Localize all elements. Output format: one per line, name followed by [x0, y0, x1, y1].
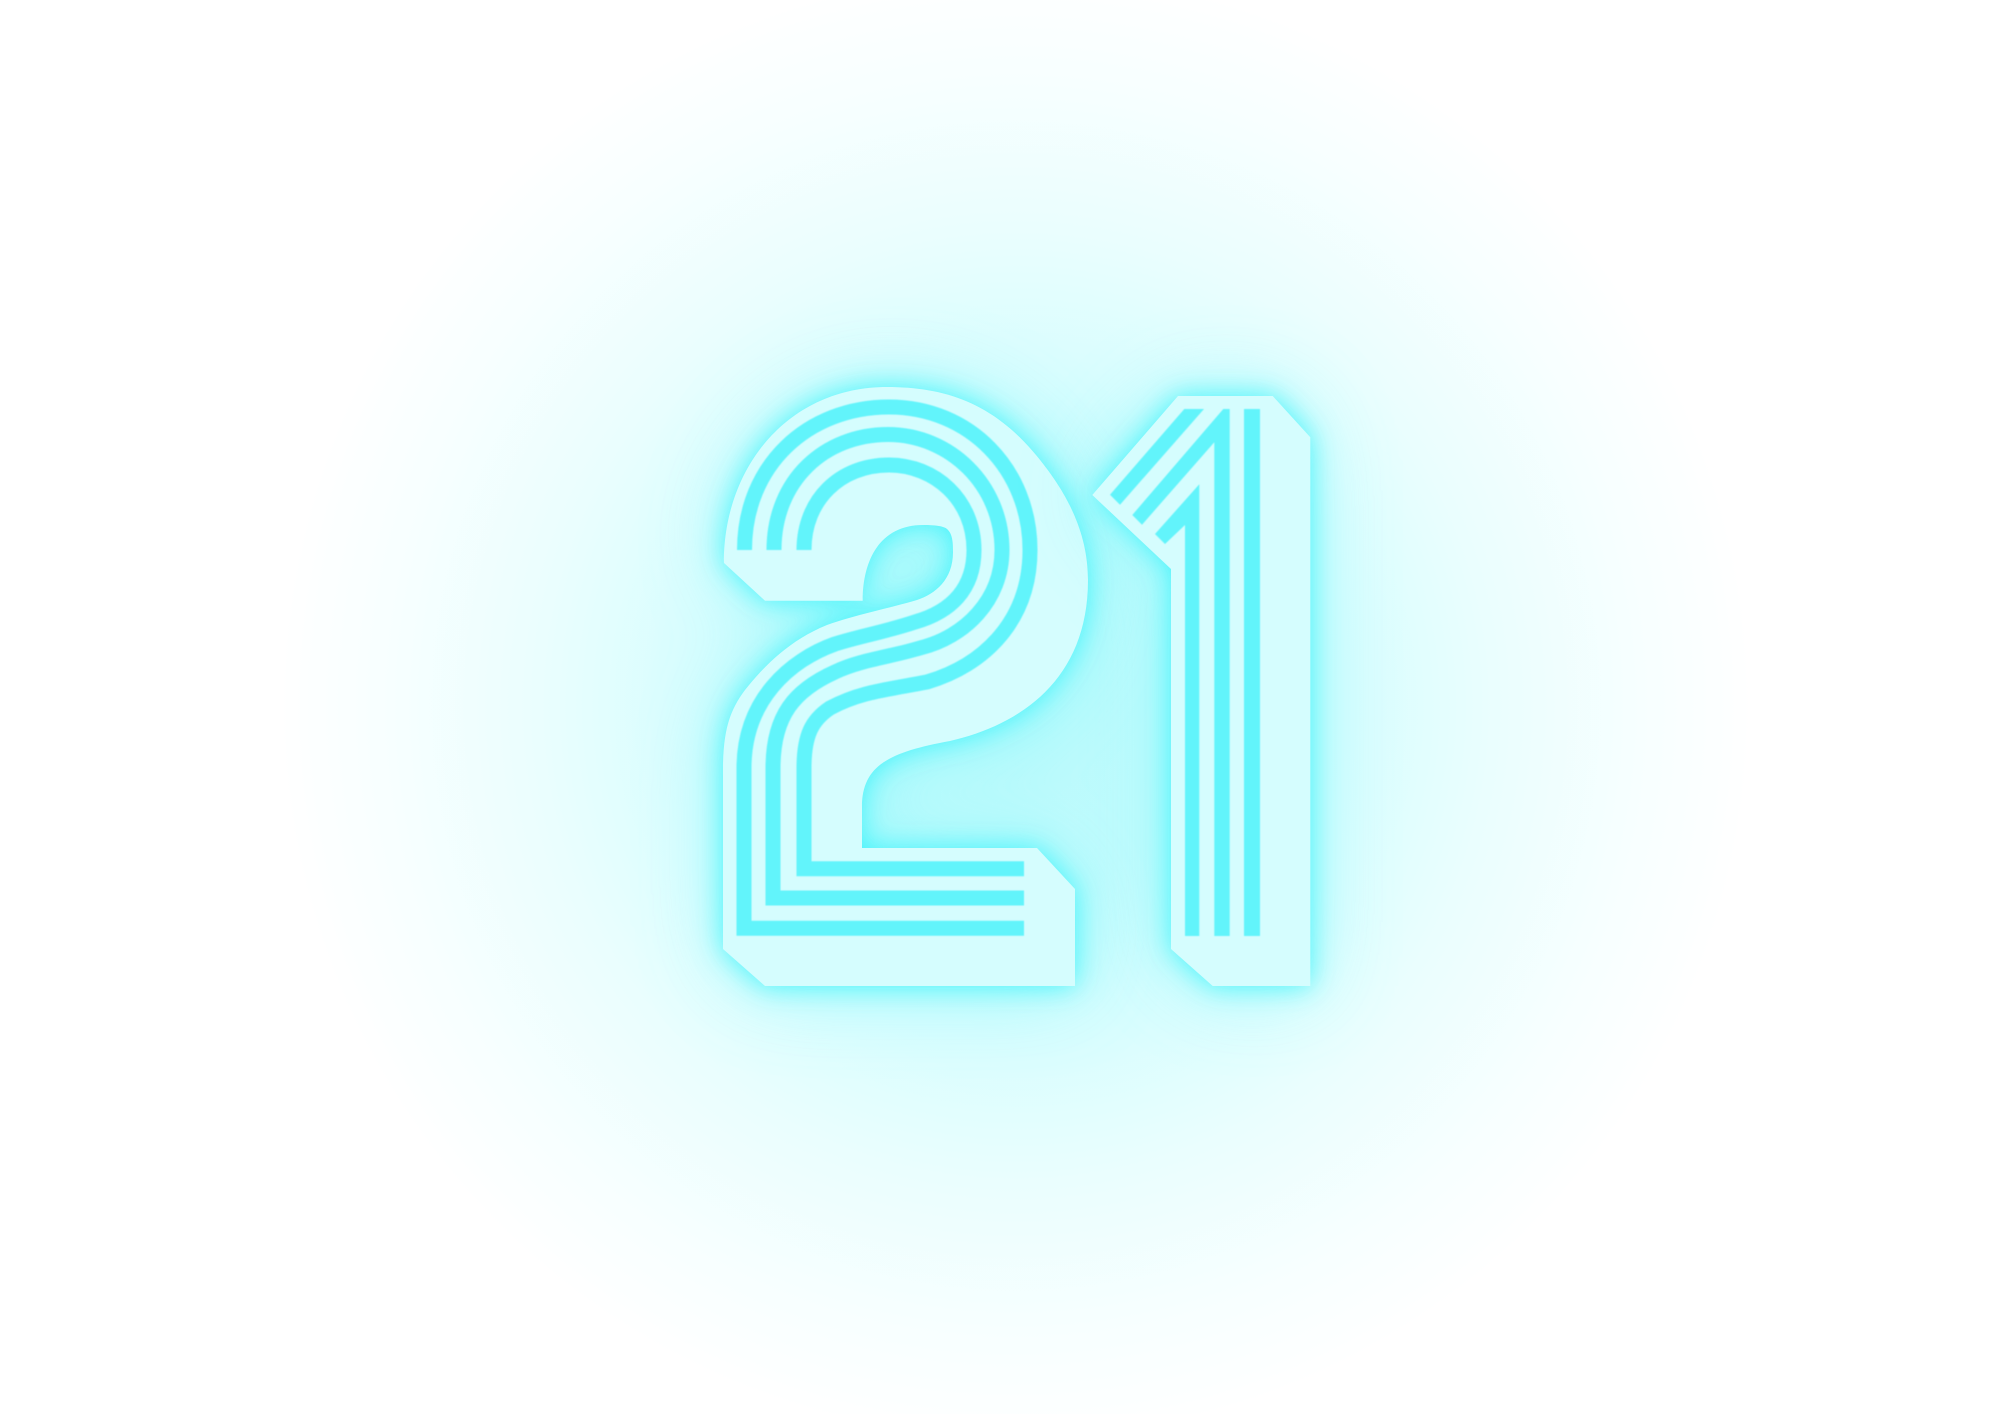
digit 2 [723, 387, 1088, 986]
digit 1 body [1092, 396, 1310, 986]
digit 1 [1092, 396, 1310, 986]
digit 1 neon stripes [1110, 409, 1260, 936]
digit 2 neon stripes [744, 407, 1030, 928]
digit 2 body [723, 387, 1088, 986]
